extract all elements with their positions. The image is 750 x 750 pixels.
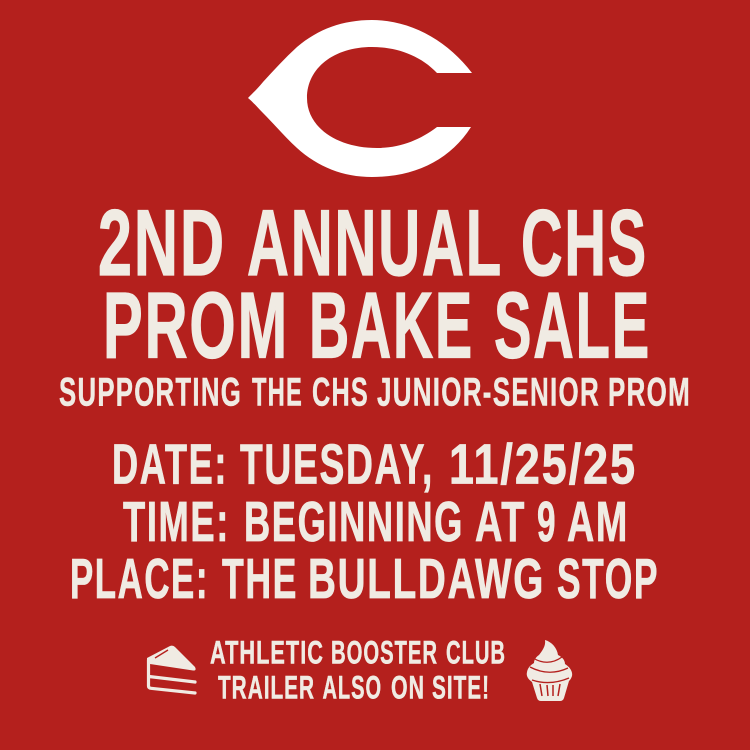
event details: 11/25/25: [449, 432, 637, 496]
subtitle: JUNIOR-SENIOR: [377, 370, 600, 414]
event details: DATE:: [112, 432, 228, 496]
event details: TIME:: [123, 490, 230, 554]
footer note: BOOSTER: [331, 634, 438, 670]
title: SALE: [494, 272, 651, 378]
footer note: TRAILER: [218, 670, 315, 706]
title: 2ND: [98, 190, 226, 295]
event details: AM: [567, 490, 629, 554]
footer note: ATHLETIC: [210, 634, 324, 670]
event details: BEGINNING: [244, 490, 464, 554]
footer note: CLUB: [446, 634, 506, 670]
title: [98, 190, 651, 378]
icon: cake slice: [147, 646, 196, 693]
title: PROM: [103, 272, 289, 378]
icon: cupcake: [527, 640, 572, 701]
logo: C emblem: [248, 20, 472, 177]
subtitle: CHS: [312, 370, 369, 414]
title: BAKE: [309, 272, 474, 378]
event details: AT: [475, 490, 526, 554]
event details: THE: [222, 547, 298, 611]
footer note: ON: [391, 670, 425, 706]
title: CHS: [521, 190, 648, 295]
event details: PLACE:: [70, 547, 209, 611]
subtitle: THE: [252, 370, 303, 414]
event details: TUESDAY,: [240, 432, 434, 496]
title: ANNUAL: [247, 190, 503, 295]
event details: STOP: [557, 547, 659, 611]
subtitle: SUPPORTING: [59, 370, 242, 414]
event details: 9: [537, 490, 557, 554]
subtitle: PROM: [608, 370, 691, 414]
footer note: [210, 634, 506, 706]
event details: [70, 432, 659, 611]
event details: BULLDAWG: [308, 547, 545, 611]
footer note: SITE!: [432, 670, 490, 706]
subtitle: [59, 370, 691, 414]
footer note: ALSO: [322, 670, 382, 706]
